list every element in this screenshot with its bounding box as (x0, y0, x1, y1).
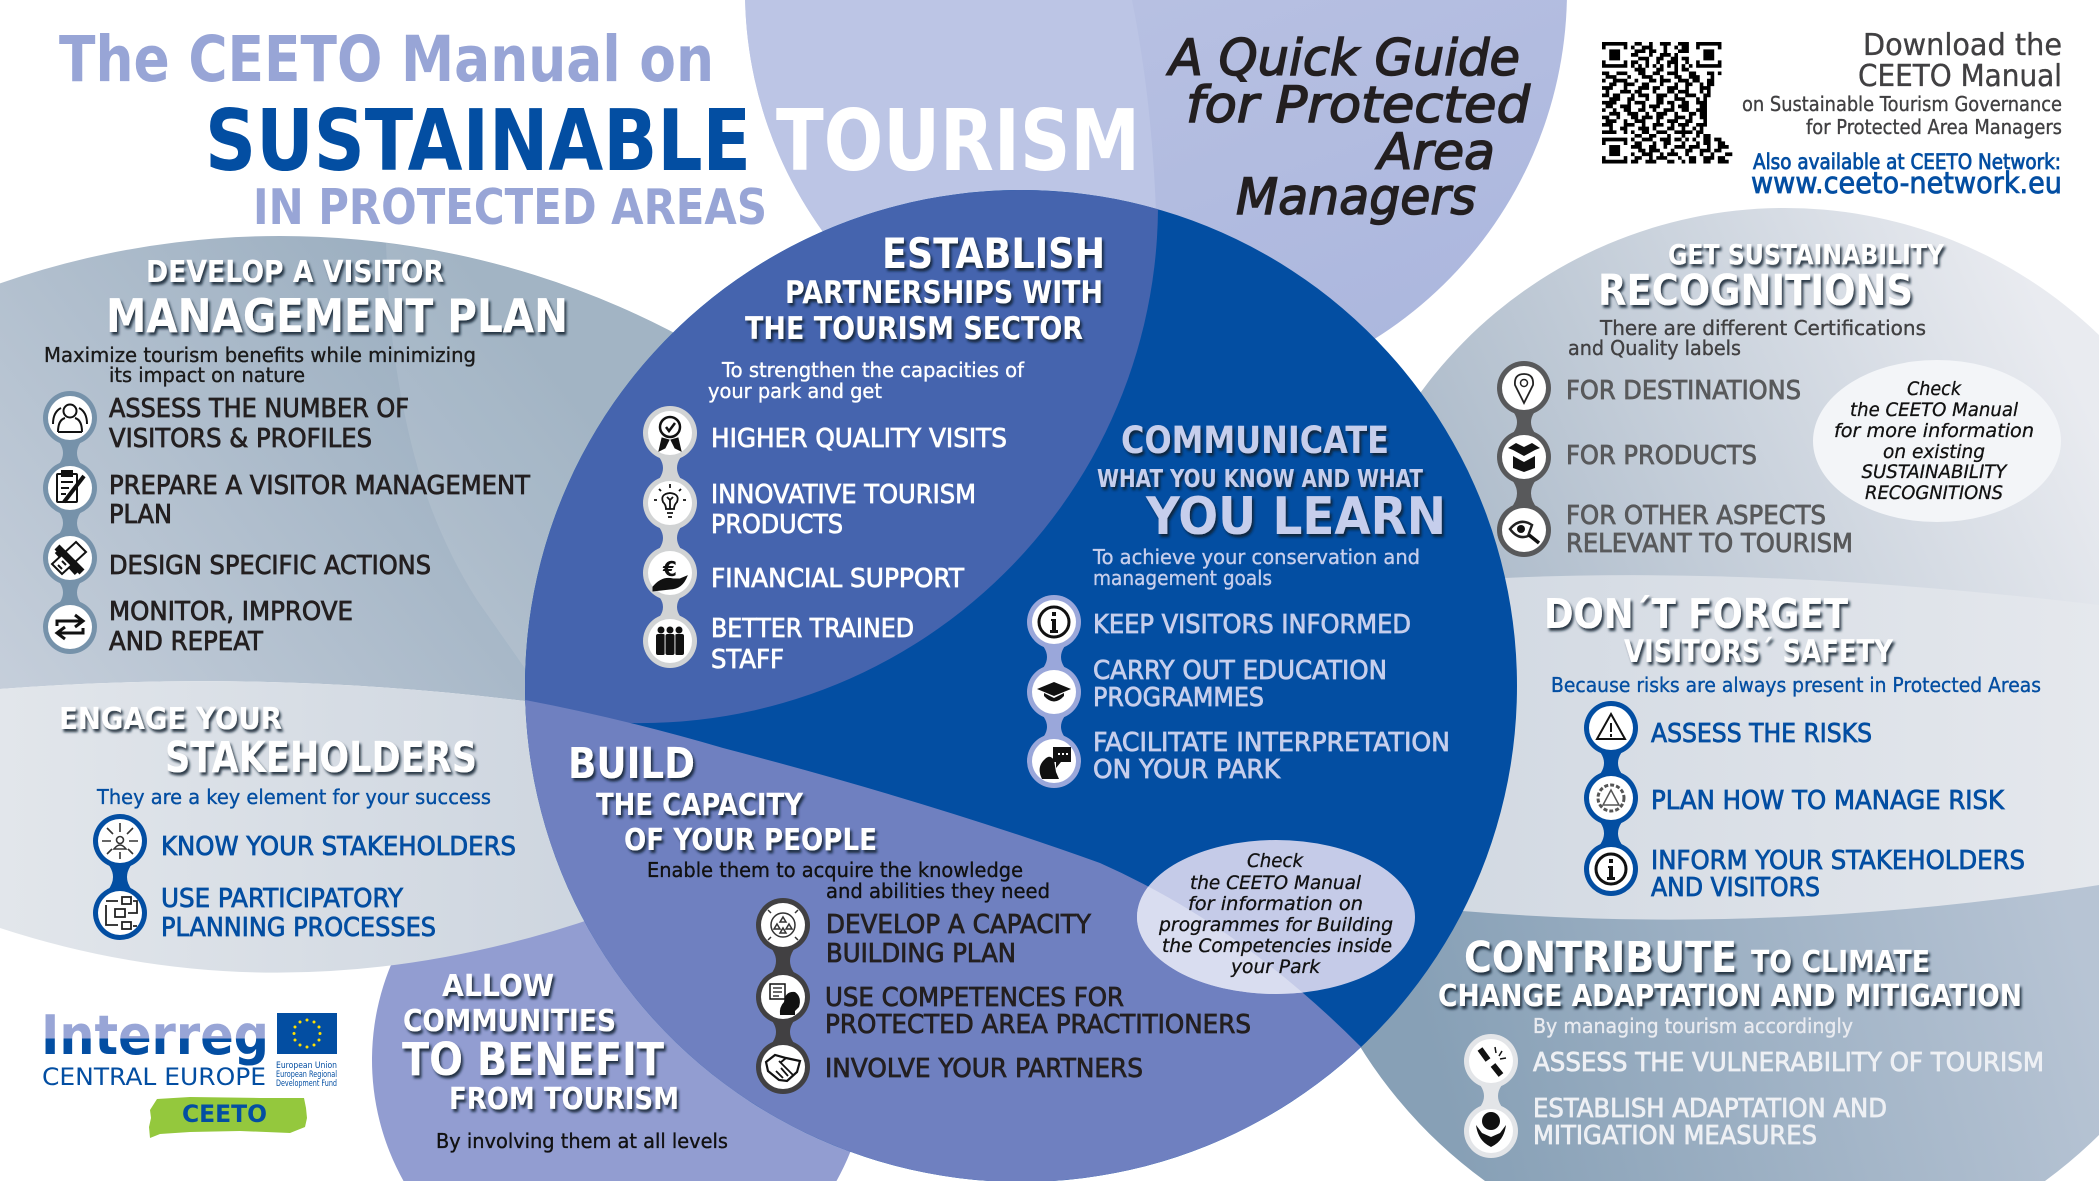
network link: Also available at CEETO Network: (1753, 150, 2061, 174)
background: visitor safety lens (1400, 575, 2099, 920)
callout: capacity programmes: your Park (1230, 956, 1321, 978)
panel: visitor safety (1544, 590, 2041, 903)
callout: the CEETO Manual (1850, 399, 2019, 421)
download text: Download the (1863, 28, 2062, 63)
icon chain (43, 391, 97, 654)
panel: visitor management plan (43, 255, 568, 657)
heading: DEVELOP A VISITOR (146, 255, 444, 290)
icon chain (93, 814, 147, 940)
callout: Check (1907, 378, 1962, 400)
heading (402, 969, 679, 1117)
action list: PLANNING PROCESSES (161, 913, 436, 943)
heading: DON´T FORGET (1544, 590, 1848, 638)
heading: OF YOUR PEOPLE (624, 823, 877, 858)
download text: for Protected Area Managers (1806, 115, 2062, 139)
background: grey visitor plan circle (0, 236, 700, 703)
intro text: By involving them at all levels (436, 1129, 728, 1153)
intro text: By managing tourism accordingly (1533, 1014, 1853, 1038)
heading (568, 739, 877, 858)
subtitle: quick guide (1166, 29, 1530, 226)
action list: BETTER TRAINED (711, 614, 914, 644)
intro text: management goals (1093, 566, 1272, 590)
heading: COMMUNITIES (403, 1004, 616, 1039)
background: capacity region (525, 700, 1361, 1181)
intro text: To achieve your conservation and (1092, 545, 1420, 569)
intro text: Because risks are always present in Protected Areas (1551, 673, 2041, 697)
panel: build capacity (568, 739, 1251, 1094)
EU funding text (276, 1061, 337, 1089)
intro text: To strengthen the capacities of (721, 358, 1025, 382)
action list (711, 424, 1007, 675)
action list (161, 832, 516, 943)
action list: ASSESS THE RISKS (1651, 719, 1872, 749)
title block: SUSTAINABLE (205, 92, 751, 191)
heading (59, 702, 477, 783)
panel: allow communities (402, 969, 728, 1153)
heading: GET SUSTAINABILITY (1668, 238, 1945, 271)
action list: AND REPEAT (109, 627, 263, 657)
list: FOR DESTINATIONS (1566, 376, 1801, 406)
intro text (708, 358, 1025, 403)
list (1566, 376, 1853, 559)
heading: WHAT YOU KNOW AND WHAT (1097, 464, 1423, 493)
download text: CEETO Manual (1858, 59, 2062, 94)
action list (109, 394, 530, 657)
heading: ESTABLISH (882, 229, 1105, 278)
action list (825, 910, 1251, 1084)
heading: CONTRIBUTE (1464, 933, 1737, 983)
title block: IN PROTECTED AREAS (253, 179, 767, 236)
action list: STAFF (711, 645, 784, 675)
icon chain (1497, 361, 1551, 557)
logo: CEETO green brush (149, 1097, 307, 1138)
heading: ALLOW (442, 969, 554, 1004)
heading: STAKEHOLDERS (165, 733, 477, 783)
action list: PRODUCTS (711, 510, 843, 540)
heading: RECOGNITIONS (1598, 266, 1913, 316)
callout: capacity programmes: the Competencies inside (1162, 935, 1392, 957)
network link: www.ceeto-network.eu (1751, 166, 2062, 200)
action list: MONITOR, IMPROVE (109, 597, 353, 627)
action list: KNOW YOUR STAKEHOLDERS (161, 832, 516, 862)
background: lavender communities circle (372, 812, 868, 1181)
background: big blue circle (525, 190, 1517, 1181)
download text (1742, 28, 2062, 139)
action list: FACILITATE INTERPRETATION (1093, 728, 1450, 758)
intro text: your park and get (708, 379, 882, 403)
list: FOR PRODUCTS (1566, 441, 1757, 471)
heading: COMMUNICATE (1121, 419, 1389, 462)
callout: capacity programmes: for information on (1188, 893, 1363, 915)
action list (1651, 719, 2025, 903)
heading (1438, 933, 2022, 1014)
subtitle: quick guide: Managers (1236, 168, 1476, 226)
heading (1097, 419, 1446, 547)
action list (1093, 610, 1450, 785)
action list: PREPARE A VISITOR MANAGEMENT (109, 471, 530, 501)
subtitle: quick guide: A Quick Guide (1166, 29, 1520, 87)
panel: communicate (1027, 419, 1450, 788)
background: climate circle (1299, 885, 2099, 1181)
action list: MITIGATION MEASURES (1533, 1121, 1817, 1151)
title block: TOURISM (776, 92, 1140, 191)
heading (106, 255, 568, 343)
intro text: There are different Certifications (1599, 316, 1926, 340)
subtitle: quick guide: for Protected (1186, 76, 1530, 134)
logo: Interreg: Interreg (41, 1004, 269, 1067)
title block (59, 23, 1140, 236)
icon chain (1584, 701, 1638, 896)
list: RELEVANT TO TOURISM (1566, 529, 1853, 559)
intro text (1092, 545, 1420, 590)
action list: CARRY OUT EDUCATION (1093, 656, 1387, 686)
logo: Central Europe: CENTRAL EUROPE (42, 1063, 266, 1091)
action list: ASSESS THE VULNERABILITY OF TOURISM (1533, 1048, 2044, 1078)
panel: partnerships (643, 229, 1105, 675)
action list: DESIGN SPECIFIC ACTIONS (109, 551, 431, 581)
heading: FROM TOURISM (449, 1082, 679, 1117)
background: lilac top circle (745, 0, 1567, 402)
icon chain (1464, 1034, 1518, 1158)
QR code (1602, 44, 1732, 162)
action list: PLAN (109, 500, 172, 530)
action list: DEVELOP A CAPACITY (826, 910, 1091, 940)
action list: ESTABLISH ADAPTATION AND (1533, 1094, 1887, 1124)
EU funding text: European Union (276, 1061, 337, 1071)
action list: PROTECTED AREA PRACTITIONERS (825, 1010, 1251, 1040)
heading (1544, 590, 1893, 670)
icon chain (756, 898, 810, 1094)
heading: MANAGEMENT PLAN (106, 289, 568, 343)
action list: ON YOUR PARK (1093, 755, 1281, 785)
callout: capacity programmes: Check (1247, 850, 1304, 872)
heading: THE CAPACITY (596, 788, 804, 823)
callout: SUSTAINABILITY (1862, 461, 2008, 483)
background: lighter lilac overlap (745, 0, 1156, 231)
heading: CHANGE ADAPTATION AND MITIGATION (1438, 979, 2022, 1014)
action list: INNOVATIVE TOURISM (711, 480, 976, 510)
icon: EU flag (277, 1013, 337, 1054)
heading (745, 229, 1105, 347)
callout: on existing (1883, 441, 1985, 463)
heading: VISITORS´ SAFETY (1624, 634, 1893, 670)
heading (1598, 238, 1945, 316)
intro text: Enable them to acquire the knowledge (647, 858, 1023, 882)
intro text: They are a key element for your success (96, 785, 491, 809)
heading: PARTNERSHIPS WITH (785, 275, 1103, 311)
heading: TO CLIMATE (1751, 945, 1930, 980)
intro text: its impact on nature (109, 363, 305, 387)
action list: ASSESS THE NUMBER OF (109, 394, 409, 424)
action list: VISITORS & PROFILES (109, 424, 372, 454)
icon chain (1027, 595, 1081, 788)
background: partnerships lens (525, 190, 1158, 723)
action list: BUILDING PLAN (826, 939, 1016, 969)
action list: PLAN HOW TO MANAGE RISK (1651, 786, 2005, 816)
heading: YOU LEARN (1145, 487, 1446, 547)
callout: capacity programmes: the CEETO Manual (1190, 872, 1362, 894)
euro sign: € (662, 557, 677, 581)
heading: THE TOURISM SECTOR (745, 311, 1083, 347)
callout: capacity programmes: programmes for Building (1158, 914, 1393, 936)
callout: capacity programmes (1137, 840, 1415, 994)
action list: INFORM YOUR STAKEHOLDERS (1651, 846, 2025, 876)
intro text: Maximize tourism benefits while minimizing (44, 343, 476, 367)
panel: climate adaptation (1438, 933, 2044, 1158)
action list: HIGHER QUALITY VISITS (711, 424, 1007, 454)
intro text: and abilities they need (826, 879, 1050, 903)
callout: for more information (1834, 420, 2034, 442)
title block: The CEETO Manual on (59, 23, 714, 96)
download text: on Sustainable Tourism Governance (1742, 92, 2062, 116)
action list: USE COMPETENCES FOR (825, 983, 1124, 1013)
EU funding text: European Regional (276, 1070, 337, 1080)
network link (1751, 150, 2062, 200)
intro text (44, 343, 476, 387)
action list: AND VISITORS (1651, 873, 1820, 903)
action list: KEEP VISITORS INFORMED (1093, 610, 1411, 640)
action list: INVOLVE YOUR PARTNERS (825, 1054, 1143, 1084)
action list: USE PARTICIPATORY (161, 884, 403, 914)
background: light stakeholder lens (0, 681, 600, 973)
background: lighter overlay in grey circle (386, 243, 700, 703)
background: recognitions circle (1333, 208, 2099, 1112)
heading: TO BENEFIT (402, 1033, 664, 1086)
panel: sustainability recognitions (1497, 238, 2061, 559)
intro text (1568, 316, 1926, 360)
callout (1813, 360, 2061, 522)
logo: CEETO green brush: CEETO (182, 1100, 267, 1128)
action list: PROGRAMMES (1093, 683, 1264, 713)
EU funding text: Development Fund (276, 1079, 337, 1089)
heading: BUILD (568, 739, 695, 789)
list: FOR OTHER ASPECTS (1566, 501, 1826, 531)
subtitle: quick guide: Area (1375, 123, 1495, 181)
icon chain (643, 406, 697, 668)
panel: engage stakeholders (59, 702, 516, 943)
action list: FINANCIAL SUPPORT (711, 564, 964, 594)
logos (41, 1004, 337, 1138)
callout: RECOGNITIONS (1865, 482, 2003, 504)
heading: ENGAGE YOUR (59, 702, 282, 737)
intro text: and Quality labels (1568, 336, 1741, 360)
intro text (647, 858, 1050, 903)
action list (1533, 1048, 2044, 1151)
